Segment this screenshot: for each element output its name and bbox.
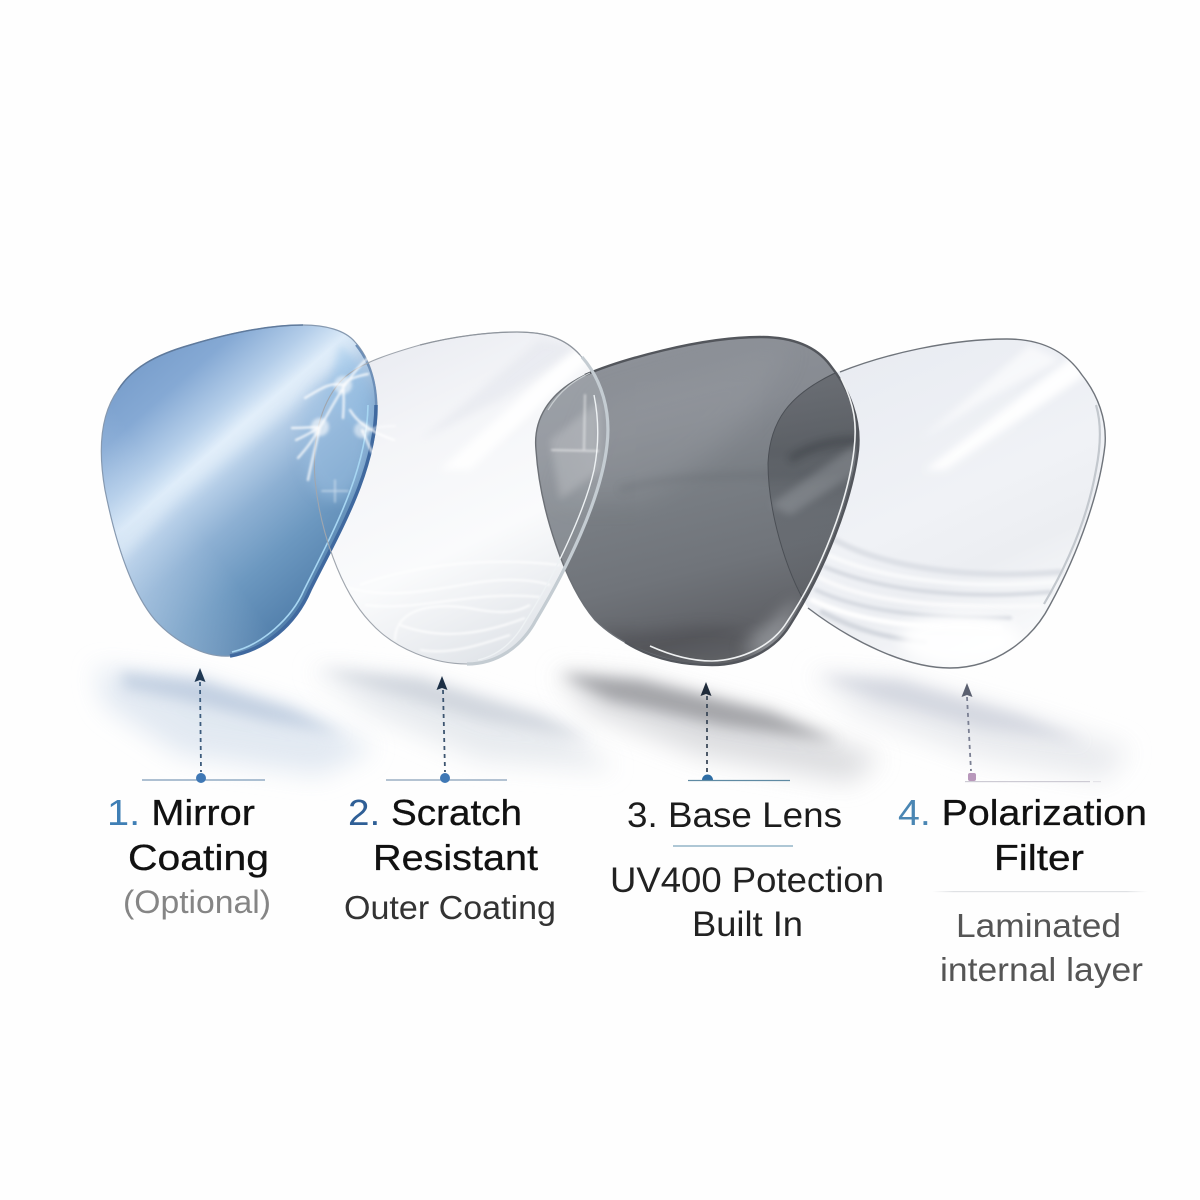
- lens 1: mirror coating: [101, 325, 377, 656]
- shadow: base lens: [555, 672, 880, 782]
- shadow: polarization filter lens: [810, 672, 1130, 780]
- shadow: mirror coating lens: [95, 668, 375, 775]
- label: 1. Mirror Coating (Optional): [107, 792, 271, 920]
- lens 2: scratch resistant coating: [354, 332, 590, 664]
- label: 2. Scratch Resistant Outer Coating: [344, 792, 556, 926]
- label: 3. Base Lens UV400 Potection Built In: UV400 Potection: [610, 861, 884, 900]
- label: 4. Polarization Filter Laminated internal layer: Filter: [994, 837, 1084, 878]
- label: 2. Scratch Resistant Outer Coating: Outer Coating: [344, 889, 556, 926]
- arrow: scratch resistant: [386, 676, 507, 783]
- label: 3. Base Lens UV400 Potection Built In: [610, 796, 884, 944]
- overlap with scratch lens: [536, 374, 606, 565]
- label: 3. Base Lens UV400 Potection Built In: Built In: [692, 905, 803, 944]
- label: 1. Mirror Coating (Optional): (Optional): [123, 884, 271, 920]
- arrow: mirror coating: [142, 668, 265, 783]
- label: 4. Polarization Filter Laminated internal layer: Laminated: [956, 907, 1121, 944]
- lens 2 rim: [314, 332, 608, 664]
- label: 2. Scratch Resistant Outer Coating: Resistant: [373, 837, 538, 878]
- lens 3: grey base lens: [534, 336, 860, 666]
- infographic: polarized lens layers: [94, 324, 1145, 988]
- lens 4 rim: [808, 339, 1105, 668]
- label: 4. Polarization Filter Laminated internal layer: [898, 792, 1148, 988]
- lens 4: polarization filter: [805, 340, 1104, 660]
- label: 1. Mirror Coating (Optional): Coating: [128, 837, 269, 878]
- overlap with polarization lens: [768, 374, 858, 550]
- glare: sparkle on mirror edge: [292, 358, 395, 502]
- shadow: scratch resistant lens: [310, 668, 615, 770]
- glare: sparkle on base lens: [552, 395, 598, 451]
- label: 1. Mirror Coating (Optional): 1. Mirror: [107, 792, 255, 833]
- label: 4. Polarization Filter Laminated internal layer: internal layer: [940, 951, 1143, 988]
- label: 2. Scratch Resistant Outer Coating: 2. Scratch: [348, 792, 522, 833]
- arrow: polarization filter: [962, 683, 1101, 782]
- label: 3. Base Lens UV400 Potection Built In: 3. Base Lens: [627, 796, 842, 835]
- label: 4. Polarization Filter Laminated internal layer: 4. Polarization: [898, 792, 1147, 833]
- arrow: base lens: [688, 682, 790, 780]
